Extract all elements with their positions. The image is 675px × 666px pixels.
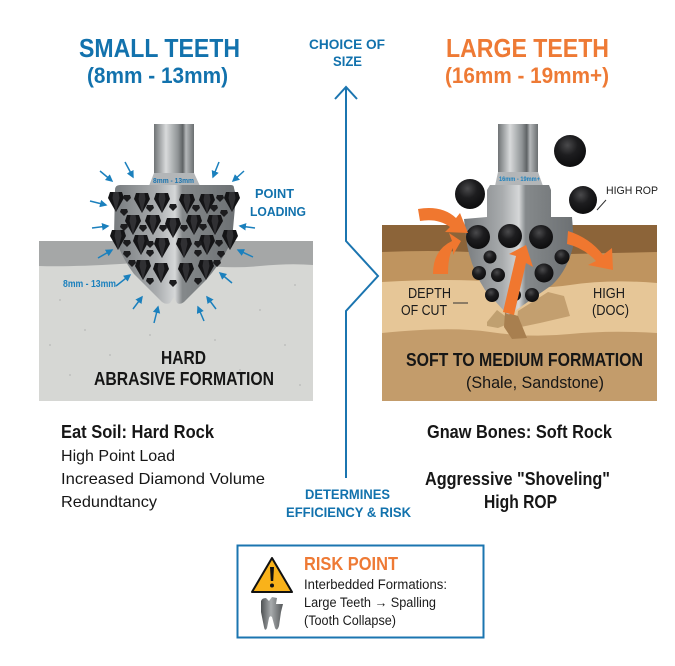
text block: large teeth notes	[425, 422, 613, 512]
label: determines efficiency and risk: DETERMINES	[305, 487, 390, 502]
text block: large teeth notes: High ROP	[484, 492, 557, 512]
label: tooth size: 8mm - 13mm	[63, 278, 116, 290]
title: small teeth	[79, 33, 240, 88]
orange flow arrows	[418, 208, 613, 315]
label: high rop: HIGH ROP	[606, 185, 658, 197]
label: high doc: HIGH	[593, 285, 625, 302]
label: depth of cut	[401, 285, 468, 319]
label: point loading	[250, 186, 306, 219]
panel: soft formation	[382, 124, 658, 401]
icon: broken tooth	[261, 597, 283, 630]
point load arrows	[90, 162, 255, 323]
label: point loading: POINT	[255, 186, 294, 201]
label: depth of cut: DEPTH	[408, 285, 451, 302]
label: soft to medium formation	[406, 350, 643, 392]
rock ground	[39, 241, 313, 401]
label: choice of size: SIZE	[333, 53, 362, 69]
risk text: Large Teeth → Spalling	[304, 595, 436, 610]
label: point loading: LOADING	[250, 204, 306, 219]
label: hard abrasive formation: ABRASIVE FORMATION	[94, 369, 274, 389]
label: high doc: (DOC)	[592, 302, 629, 319]
collar size label: 16mm - 19mm+	[499, 176, 540, 183]
soil layers	[382, 225, 657, 401]
text block: small teeth notes: Eat Soil: Hard Rock	[61, 422, 215, 442]
title: small teeth: SMALL TEETH	[79, 33, 240, 63]
arrow: center divider	[335, 87, 378, 478]
heading: risk point: RISK POINT	[304, 554, 398, 574]
label: soft to medium formation: (Shale, Sandstone)	[466, 374, 604, 392]
callout: risk point	[238, 546, 484, 638]
label: hard abrasive formation	[94, 348, 274, 389]
text block: small teeth notes: Increased Diamond Volume	[61, 471, 265, 488]
text block: small teeth notes: Redundtancy	[61, 494, 157, 511]
label: choice of size	[309, 36, 385, 69]
drill bit: large teeth	[464, 124, 574, 314]
risk text: Interbedded Formations:	[304, 577, 447, 592]
label: determines efficiency and risk	[286, 487, 411, 520]
flying cuttings	[455, 135, 597, 214]
label: depth of cut: OF CUT	[401, 302, 447, 319]
label: hard abrasive formation: HARD	[161, 348, 206, 368]
text block: small teeth notes	[61, 422, 265, 511]
collar size label: 8mm - 13mm	[153, 176, 194, 185]
label: determines efficiency and risk: EFFICIENCY & RISK	[286, 505, 411, 520]
text block: small teeth notes: High Point Load	[61, 448, 175, 465]
icon: warning triangle	[252, 558, 292, 592]
text block: large teeth notes: Gnaw Bones: Soft Rock	[427, 422, 613, 442]
label: soft to medium formation: SOFT TO MEDIUM FORMATION	[406, 350, 643, 370]
rock cuttings	[487, 292, 570, 339]
label: high doc	[592, 285, 629, 319]
text block: large teeth notes: Aggressive "Shoveling"	[425, 469, 610, 489]
title: small teeth: (8mm - 13mm)	[87, 63, 228, 88]
risk text	[304, 577, 447, 628]
label: choice of size: CHOICE OF	[309, 36, 385, 52]
risk text: (Tooth Collapse)	[304, 613, 396, 628]
label: high rop	[597, 185, 658, 210]
title: large teeth	[445, 33, 609, 88]
drill bit: small teeth	[108, 124, 240, 304]
title: large teeth: LARGE TEETH	[446, 33, 609, 63]
small diamond teeth	[108, 192, 240, 287]
panel: hard formation	[39, 124, 313, 401]
title: large teeth: (16mm - 19mm+)	[445, 63, 609, 88]
large round teeth	[466, 224, 570, 302]
